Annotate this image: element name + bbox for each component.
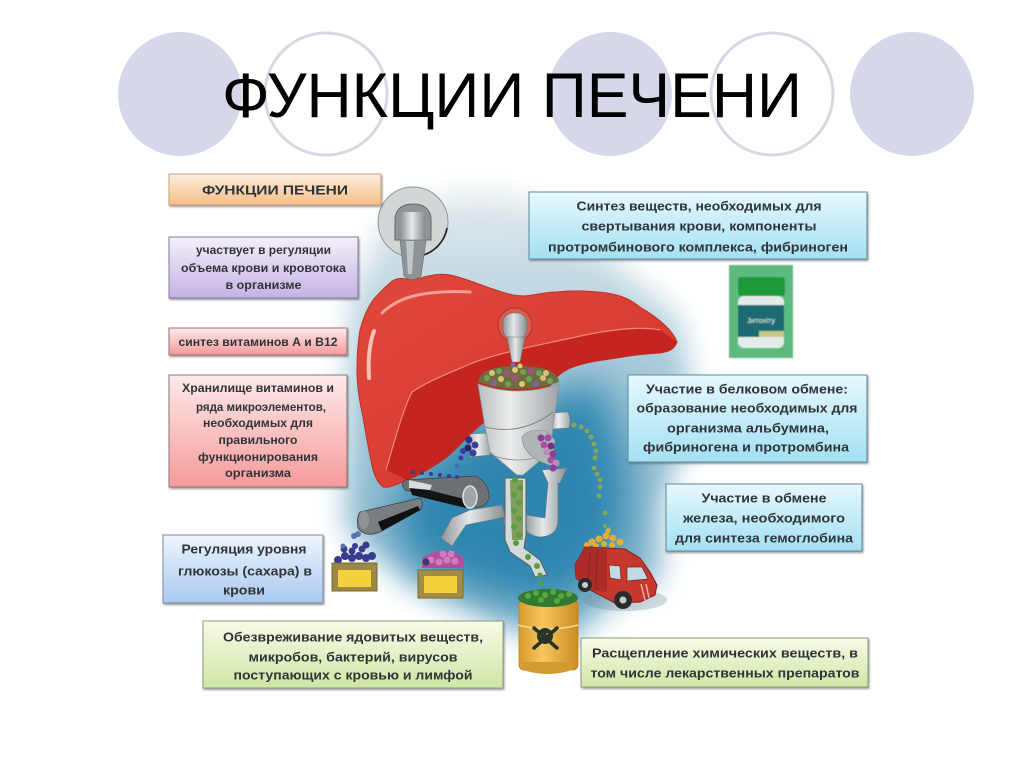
panel: blood volume: в организме bbox=[226, 278, 302, 292]
panel: vitamin storage: Хранилище витаминов и bbox=[182, 381, 334, 395]
product jar: Јитоxiту bbox=[747, 316, 775, 325]
panel: clotting synthesis: свертывания крови, компоненты bbox=[582, 218, 816, 234]
lower conveyor bbox=[357, 498, 422, 534]
beads: green stream to truck bbox=[572, 422, 611, 531]
middle bin: purple beads bbox=[418, 550, 464, 598]
right pipe bbox=[551, 412, 570, 429]
panel: protein metabolism: образование необходимых для bbox=[636, 400, 858, 416]
panel: detoxification: поступающих с кровью и лимфой bbox=[234, 668, 473, 682]
funnel rim bbox=[478, 366, 559, 389]
liver ligament line bbox=[386, 328, 660, 470]
liver bbox=[357, 274, 677, 487]
panel: protein metabolism: организма альбумина, bbox=[667, 420, 829, 436]
left branch pipe bbox=[441, 505, 505, 546]
panel: vitamin storage: ряда микроэлементов, bbox=[196, 400, 326, 414]
left bin: blue beads bbox=[332, 531, 377, 591]
panel: vitamin storage: организма bbox=[225, 466, 291, 480]
panel: heading bbox=[169, 174, 381, 205]
left pipe bbox=[470, 433, 490, 457]
right drain elbow bbox=[524, 468, 567, 537]
panel: chemical breakdown: Расщепление химических веществ, в bbox=[592, 646, 858, 660]
funnel machine bbox=[441, 366, 570, 577]
panel: blood volume: участвует в регуляции bbox=[196, 243, 331, 257]
right inner pipe bbox=[522, 430, 555, 466]
panel: detoxification: микробов, бактерий, вирусов bbox=[248, 650, 458, 664]
blue background glow bbox=[345, 195, 695, 645]
panel: heading: ФУНКЦИИ ПЕЧЕНИ bbox=[202, 182, 348, 198]
panel: blood volume bbox=[169, 237, 358, 298]
inner tap bbox=[498, 308, 532, 362]
panel: blood volume: объема крови и кровотока bbox=[181, 261, 346, 275]
panel: chemical breakdown: том числе лекарственных препаратов bbox=[590, 666, 860, 680]
panel: vitamin storage: функционирования bbox=[198, 450, 318, 464]
panel: iron metabolism: для синтеза гемоглобина bbox=[675, 530, 854, 546]
panel: clotting synthesis: протромбинового комплекса, фибриноген bbox=[548, 240, 848, 254]
panel: vitamin synthesis bbox=[169, 328, 347, 355]
panel: protein metabolism bbox=[628, 375, 867, 462]
panel: protein metabolism: фибриногена и протромбина bbox=[643, 440, 850, 454]
panel: iron metabolism bbox=[666, 484, 862, 551]
panel: detoxification: Обезвреживание ядовитых веществ, bbox=[223, 630, 483, 644]
liver highlights bbox=[382, 292, 470, 313]
panel: vitamin storage bbox=[169, 375, 347, 487]
bent right branch bbox=[504, 512, 526, 530]
panel: glucose regulation bbox=[163, 535, 323, 603]
panel: clotting synthesis: Синтез веществ, необходимых для bbox=[576, 198, 822, 214]
funnel body bbox=[478, 384, 559, 475]
beads: purple and blue streams bbox=[454, 434, 560, 472]
beads in funnel bbox=[484, 362, 553, 387]
central drain tube bbox=[505, 478, 547, 577]
upper conveyor bbox=[402, 470, 489, 508]
barrel with toxic sign bbox=[518, 589, 578, 674]
panel: protein metabolism: Участие в белковом обмене: bbox=[646, 382, 848, 396]
panel: detoxification bbox=[203, 621, 503, 688]
panel: glucose regulation: Регуляция уровня bbox=[182, 542, 306, 556]
title: ФУНКЦИИ ПЕЧЕНИ bbox=[222, 61, 802, 131]
panel: vitamin synthesis: синтез витаминов А и В12 bbox=[178, 335, 338, 349]
panel: iron metabolism: Участие в обмене bbox=[702, 490, 826, 506]
panel: vitamin storage: правильного bbox=[218, 433, 298, 447]
panel: glucose regulation: глюкозы (сахара) в bbox=[178, 564, 312, 578]
panel: chemical breakdown bbox=[581, 638, 868, 687]
upper tap bbox=[378, 187, 448, 280]
decorative circles bbox=[118, 32, 974, 156]
red truck bbox=[575, 528, 667, 611]
panel: iron metabolism: железа, необходимого bbox=[682, 510, 845, 526]
panel: glucose regulation: крови bbox=[223, 582, 265, 598]
liver darker lower lobe bbox=[386, 328, 677, 480]
panel: clotting synthesis bbox=[529, 192, 867, 259]
panel: vitamin storage: необходимых для bbox=[203, 416, 313, 430]
product jar bbox=[729, 265, 793, 358]
beads: green in drain bbox=[511, 477, 544, 586]
